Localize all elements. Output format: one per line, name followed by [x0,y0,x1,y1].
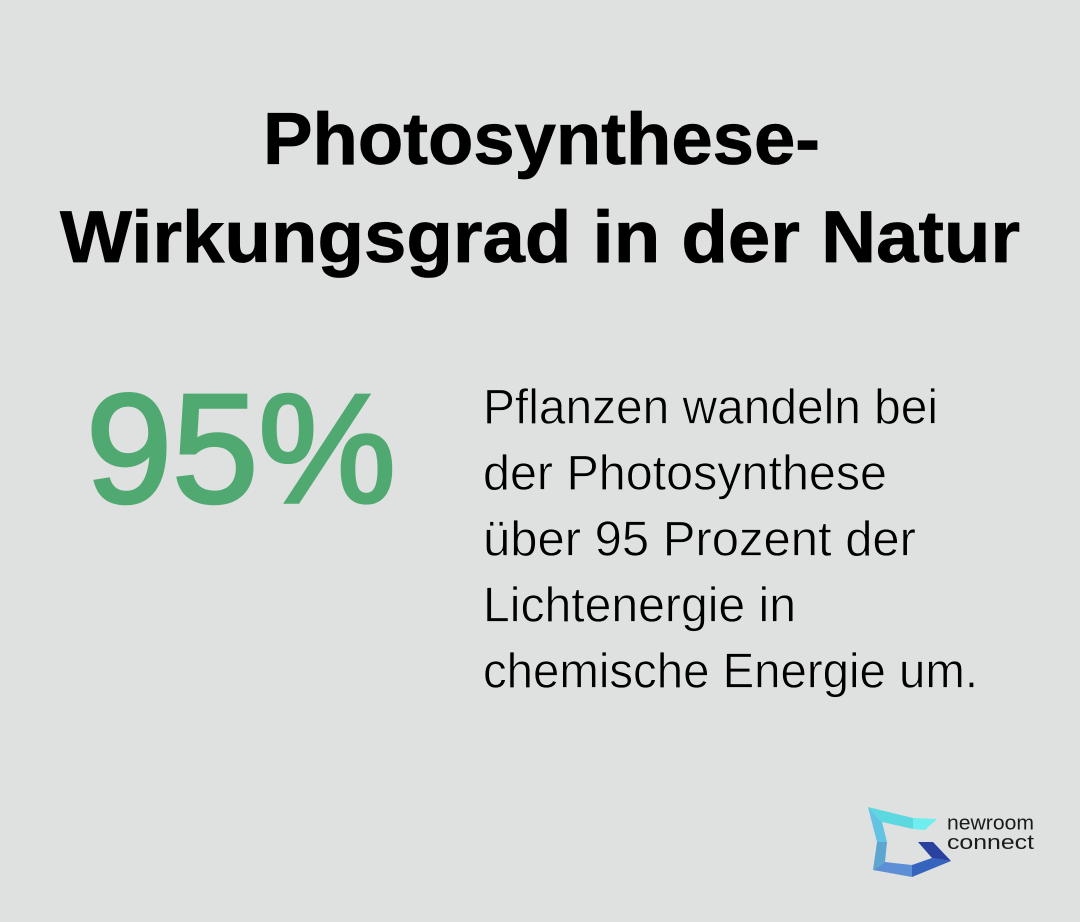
logo wordmark: newroom [947,812,1034,834]
logo: newroom connect [868,807,1034,877]
description text [483,380,978,698]
title: Wirkungsgrad in der Natur [60,197,1020,278]
logo wordmark: connect [947,831,1034,854]
title [60,99,1020,278]
icon: logo mark [868,807,951,877]
description text: über 95 Prozent der [483,512,916,566]
description text: der Photosynthese [483,446,887,500]
description text: Pflanzen wandeln bei [483,380,938,434]
description text: Lichtenergie in [483,578,796,632]
logo wordmark [947,812,1034,854]
big statistic: 95%: 95% [86,362,396,535]
description text: chemische Energie um. [483,644,978,698]
title: Photosynthese- [263,99,820,180]
